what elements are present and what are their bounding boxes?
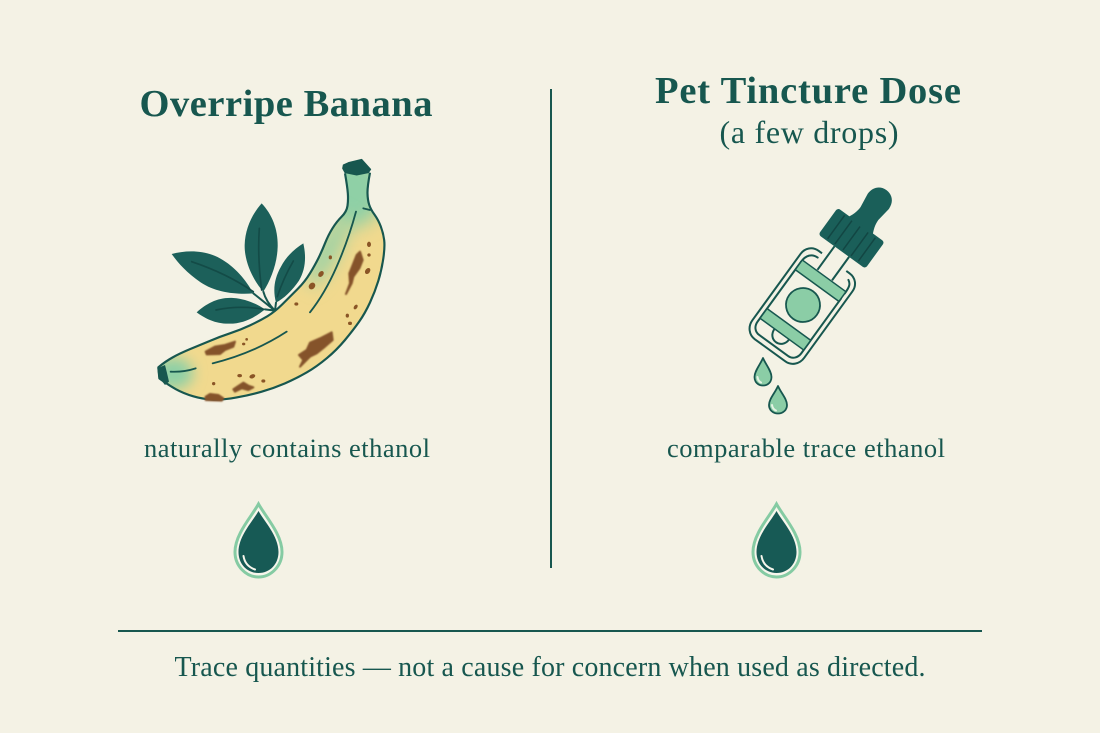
leaf veins and branch	[192, 228, 293, 311]
bottle glass	[744, 233, 868, 369]
icon: dropper bottle	[744, 171, 912, 369]
banana tip	[157, 365, 169, 385]
divider: horizontal	[118, 630, 982, 632]
bottle dropper bulb	[846, 181, 899, 237]
label: tincture: comparable trace ethanol	[667, 433, 945, 463]
bottle label bands	[760, 260, 846, 350]
divider: vertical	[550, 89, 552, 568]
banana ridges	[171, 208, 370, 372]
bottle label circle	[779, 281, 827, 329]
label: banana: naturally contains ethanol	[144, 433, 430, 463]
banana outline	[158, 173, 384, 400]
bottle cap	[818, 208, 885, 269]
footer note: Trace quantities — not a cause for concern when used as directed.	[174, 652, 926, 683]
banana body	[160, 172, 384, 398]
banana stem cap	[343, 159, 371, 175]
heading: pet tincture dose: Pet Tincture Dose	[655, 70, 961, 112]
banana brown spots	[206, 252, 363, 401]
icon: falling drops	[754, 358, 787, 414]
icon: large drop left	[235, 504, 282, 577]
icon: banana with leaves	[150, 153, 393, 407]
heading: overripe banana: Overripe Banana	[140, 83, 432, 125]
leaves	[172, 203, 305, 324]
icon: large drop right	[753, 504, 800, 577]
subheading: a few drops: (a few drops)	[720, 114, 898, 150]
